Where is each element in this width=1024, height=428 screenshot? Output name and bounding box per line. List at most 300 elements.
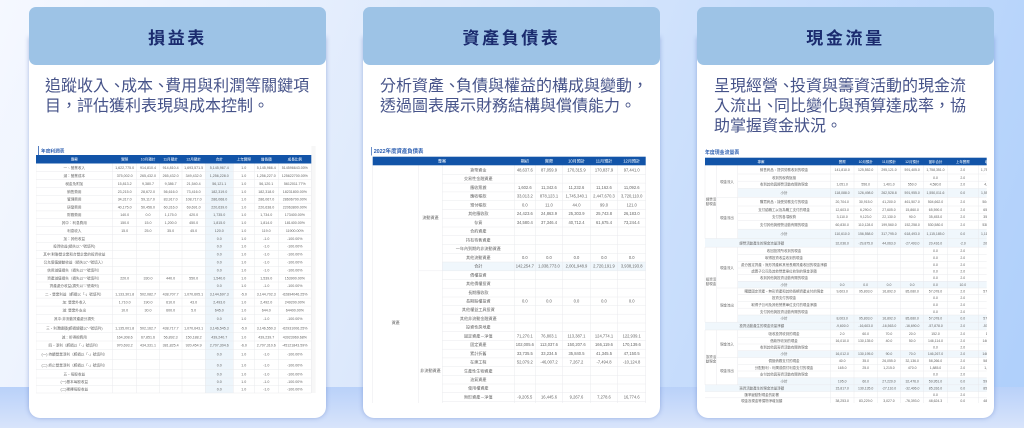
- table rows: current assets: 97,441.0: [624, 167, 640, 172]
- table rows: operating activities: 0.0: [960, 232, 965, 236]
- row group labels: 資產: [392, 319, 400, 325]
- table rows: current assets: 34,580.4: [517, 220, 533, 225]
- table rows: operating activities: 0.0: [960, 191, 965, 195]
- table rows: other gains and losses: 資產減值損失（損失以"-"號填列）: [47, 276, 101, 281]
- table rows: revenue and expenses: 60,316.0: [164, 205, 178, 209]
- table header row: 12月預計: [623, 157, 640, 163]
- table rows: investing activities: 0.0: [933, 296, 938, 300]
- table rows: other gains and losses: 1.0: [241, 284, 246, 288]
- table rows: investing activities: 2.0: [960, 263, 965, 267]
- table rows: current assets: 142,254.7: [516, 264, 535, 269]
- table rows: current assets: 24,863.9: [541, 211, 558, 216]
- table rows: profit and earnings per share: 3,144,697.3: [210, 292, 229, 296]
- table rows: revenue and expenses: 管理費用: [67, 197, 82, 202]
- table rows: revenue and expenses: 56,616.0: [164, 190, 178, 194]
- table rows: profit and earnings per share: -5.0: [241, 292, 247, 296]
- table rows: other gains and losses: 330.0: [144, 277, 152, 281]
- table rows: operating activities: 支付的各項稅費: [772, 214, 797, 219]
- table rows: other gains and losses: 1.0: [241, 237, 246, 241]
- table header row: 專案: [438, 157, 446, 163]
- table rows: operating activities: [739, 167, 999, 246]
- table rows: operating activities: 118,088.0: [835, 191, 850, 195]
- table rows: revenue and expenses: 140.0: [120, 213, 129, 217]
- table rows: operating activities: 銷售商品、提供勞務收到的現金: [760, 167, 809, 172]
- table: 2022 balance sheet: [371, 147, 646, 403]
- table rows: non-current assets: 0.0: [601, 298, 608, 303]
- table rows: investing activities: 投資支付的現金: [772, 295, 797, 300]
- table rows: financing activities: 1,885.0: [930, 366, 941, 370]
- table rows: investing activities: 收回投資所收到的現金: [767, 248, 802, 253]
- table rows: other gains and losses: -100.00%: [287, 253, 303, 257]
- table rows: profit and earnings per share: 190.0: [144, 301, 152, 305]
- table rows: non-current assets: 0.0: [546, 298, 553, 303]
- table rows: financing activities: 195.0: [838, 379, 847, 383]
- table rows: non-current assets: [460, 271, 642, 399]
- table rows: other gains and losses: -100.00%: [287, 237, 303, 241]
- table rows: operating activities: 1,550,011.6: [927, 191, 945, 195]
- table rows: investing activities: 0.0: [933, 276, 938, 280]
- table rows: financing activities: 0.0: [960, 379, 965, 383]
- table rows: current assets: 170,315.9: [567, 167, 586, 172]
- table rows: revenue and expenses: 21,540.4: [187, 182, 201, 186]
- table rows: revenue and expenses: 1,734.0: [260, 213, 272, 217]
- table header row: 上年實際: [956, 159, 970, 164]
- table rows: investing activities: 85,080.0: [906, 289, 919, 293]
- table rows: non-current assets: 170,139.6: [623, 342, 642, 347]
- table rows: operating activities: 支付其他與經營活動有關的現金: [760, 222, 809, 227]
- table rows: financing activities: 1,215.0: [883, 366, 895, 370]
- table rows: revenue and expenses: 稅金及附加: [65, 181, 84, 186]
- table rows: operating activities: 199,560.0: [881, 223, 897, 227]
- table rows: profit and earnings per share: 164,308.6: [117, 335, 133, 339]
- table rows: investing activities: -9,600.0: [836, 324, 849, 328]
- table rows: non-current assets: 0.0: [522, 298, 528, 303]
- table rows: investing activities: 85,680.0: [906, 316, 919, 320]
- table rows: financing activities: 26,055.0: [882, 359, 896, 363]
- table rows: profit and earnings per share: 減: 營業外支出: [63, 307, 86, 312]
- row group labels: [392, 214, 441, 373]
- table rows: investing activities: [739, 248, 997, 328]
- row group labels: 籌資活: [706, 354, 717, 359]
- table header row: 專案: [758, 159, 765, 164]
- table rows: financing activities: 152.0: [931, 332, 940, 336]
- table rows: revenue and expenses: 1.0: [241, 190, 246, 194]
- table rows: operating activities: -2.0: [960, 242, 966, 246]
- table rows: revenue and expenses: 56,120.1: [259, 182, 273, 186]
- table rows: profit and earnings per share: (二) 終止營業淨利（虧損以「-」號填列）: [41, 362, 107, 367]
- table rows: operating activities: 1,051.0: [836, 183, 848, 187]
- table rows: profit and earnings per share: 5.0: [191, 308, 196, 312]
- table rows: profit and earnings per share: -1.0: [263, 373, 269, 377]
- table rows: operating activities: 504,662.0: [928, 200, 943, 204]
- row group labels: 現金流出: [720, 302, 734, 307]
- table rows: current assets: 0.0: [601, 255, 608, 260]
- table rows: current assets: 878,123.1: [540, 194, 559, 199]
- table rows: revenue and expenses: 181400.00%: [285, 221, 306, 225]
- table rows: profit and earnings per share: 30.0: [144, 308, 152, 312]
- table rows: revenue and expenses: 23,215.0: [118, 190, 132, 194]
- table rows: other gains and losses: 加：其他收益: [64, 236, 85, 241]
- table rows: current assets: 其他流動資產: [466, 254, 491, 260]
- table rows: financing activities: 27,220.0: [882, 379, 896, 383]
- table rows: operating activities: 1,115,185.0: [927, 232, 945, 236]
- table rows: other gains and losses: 1,539.0: [260, 277, 272, 281]
- table rows: revenue and expenses: 減：營業成本: [64, 173, 85, 178]
- table header row: 增長額: [261, 157, 272, 162]
- table rows: profit and earnings per share: 2,493.0: [213, 301, 225, 305]
- table rows: revenue and expenses: 349,432.0: [186, 174, 202, 178]
- table rows: non-current assets: 無形資產－淨值: [464, 393, 493, 399]
- table rows: profit and earnings per share: 其中:非流動資產處分損失: [54, 316, 95, 321]
- table rows: current assets: 0.0: [546, 255, 553, 260]
- heading: income statement: [29, 7, 326, 65]
- table rows: operating activities: 556.0: [861, 183, 870, 187]
- description text: [714, 77, 966, 135]
- table rows: operating activities: 591,405.0: [905, 168, 920, 172]
- table rows: profit and earnings per share: 1,710.0: [119, 301, 131, 305]
- table rows: revenue and expenses: 286,068.0: [211, 198, 227, 202]
- table rows: profit and earnings per share: 3,144,702.3: [257, 292, 276, 296]
- table rows: current assets: 11,342.6: [541, 185, 558, 190]
- table rows: financing activities: 籌資活動產生的現金流量淨額: [739, 385, 785, 390]
- table rows: current assets: 48,637.6: [517, 167, 533, 172]
- table rows: profit and earnings per share: -5.0: [241, 327, 247, 331]
- table: annual income statement: [36, 146, 312, 394]
- table rows: profit and earnings per share: 438,707.7: [163, 292, 179, 296]
- row group labels: 現金流出: [720, 215, 734, 220]
- table header row: 11月預計: [596, 157, 612, 163]
- table rows: non-current assets: 35,840.5: [569, 351, 585, 356]
- table rows: operating activities: 156,558.0: [858, 232, 873, 236]
- table rows: other gains and losses: 0.0: [217, 269, 222, 273]
- table rows: revenue and expenses: 1,256,227.0: [257, 174, 276, 178]
- table rows: revenue and expenses: 1,735.0: [213, 213, 225, 217]
- heading: income statement: 損益表: [148, 29, 207, 48]
- table rows: profit and earnings per share: 600.0: [166, 308, 175, 312]
- row group labels: 動現金: [706, 201, 717, 206]
- table rows: financing activities: 0.0: [933, 372, 938, 376]
- table title: [38, 146, 65, 155]
- table rows: other gains and losses: 0.0: [217, 261, 222, 265]
- table rows: investing activities: 0.0: [933, 256, 938, 260]
- table header row: 實際: [121, 157, 129, 162]
- table rows: profit and earnings per share: 381,825.4: [163, 343, 179, 347]
- table rows: current assets: 40,712.4: [569, 220, 585, 225]
- table rows: profit and earnings per share: 502,082.7: [140, 292, 156, 296]
- table rows: current assets: 170,837.9: [595, 167, 614, 172]
- table rows: financing activities: 60.0: [862, 332, 869, 336]
- table rows: revenue and expenses: 914,810.4: [140, 166, 156, 170]
- table header row: [373, 157, 646, 165]
- table rows: financing activities: 48,624.3: [929, 399, 942, 403]
- table rows: other gains and losses: -100.00%: [287, 284, 303, 288]
- table rows: operating activities: 262,528.8: [881, 191, 897, 195]
- table rows: financing activities: [739, 331, 998, 403]
- table header row: 實際: [839, 159, 846, 164]
- table rows: revenue and expenses: 1.0: [241, 166, 246, 170]
- table rows: financing activities: 收到其他與籌資活動有關的現金: [760, 344, 809, 349]
- table header row: 專案: [71, 157, 78, 162]
- table rows: revenue and expenses: 15.0: [121, 229, 128, 233]
- table rows: financing activities: 分配股利、利潤或償付利息支付的現金: [755, 365, 814, 370]
- table rows: revenue and expenses: 120.0: [215, 229, 224, 233]
- table rows: non-current assets: 使用權資產: [468, 385, 489, 391]
- table rows: financing activities: 83,229.0: [859, 399, 872, 403]
- table rows: revenue and expenses: 34,317.0: [118, 198, 132, 202]
- table rows: investing activities: 8,003.0: [836, 316, 848, 320]
- table rows: revenue and expenses: 25.0: [144, 229, 152, 233]
- table rows: investing activities: 0.0: [863, 283, 868, 287]
- table rows: other gains and losses: 1.0: [241, 277, 246, 281]
- table rows: revenue and expenses: 22063800.00%: [283, 205, 308, 209]
- table rows: profit and earnings per share: 150,188.2: [186, 335, 202, 339]
- table rows: profit and earnings per share: 1.0: [241, 335, 246, 339]
- table rows: investing activities: 處分固定資產、無形資產和其他長期資產收回的現金淨額: [741, 262, 828, 267]
- table rows: financing activities: 2.0: [960, 393, 965, 397]
- table rows: profit and earnings per share: 0.0: [217, 388, 222, 392]
- table header row: 成長比例: [288, 157, 302, 162]
- table rows: investing activities: -57,878.0: [928, 324, 943, 328]
- table rows: profit and earnings per share: 56,892.3: [164, 335, 178, 339]
- row group labels: 現金流入: [720, 342, 734, 347]
- table rows: profit and earnings per share: 1.0: [241, 308, 246, 312]
- table rows: profit and earnings per share: 67,851.6: [141, 335, 155, 339]
- table rows: operating activities: 小計: [781, 190, 788, 195]
- row group labels: 動現金: [706, 281, 717, 286]
- table rows: current assets: 持有待售資產: [466, 236, 491, 242]
- table rows: operating activities: 2.0: [960, 208, 965, 212]
- table rows: other gains and losses: -100.00%: [287, 269, 303, 273]
- table rows: current assets: 61,675.4: [596, 220, 613, 225]
- table rows: financing activities: 60.0: [862, 379, 869, 383]
- table rows: non-current assets: 124,774.1: [595, 333, 614, 338]
- table rows: profit and earnings per share: 加: 營業外收入: [63, 300, 86, 305]
- table rows: profit and earnings per share: 二、營業利益（虧損以「-」號填列）: [45, 291, 104, 296]
- description text: 呈現經營、投資與籌資活動的現金流: [714, 78, 966, 95]
- table rows: operating activities: 125,552.0: [858, 168, 873, 172]
- table rows: non-current assets: 債權投資: [470, 271, 486, 277]
- table header row: 當年合計: [929, 159, 943, 164]
- table rows: revenue and expenses: 5612011.77%: [284, 182, 307, 186]
- table rows: investing activities: 2.0: [960, 276, 965, 280]
- table rows: revenue and expenses: 11900.00%: [286, 229, 305, 233]
- table rows: investing activities: 處置子公司及其他營業單位收到的現金淨額: [751, 268, 817, 273]
- table rows: non-current assets: 166,119.6: [595, 342, 614, 347]
- description text: 入流出、同比變化與預算達成率，協: [714, 98, 966, 115]
- table rows: investing activities: 0.0: [933, 269, 938, 273]
- table rows: financing activities: 16,010.0: [836, 339, 849, 343]
- table rows: investing activities: 小計: [781, 315, 788, 320]
- table rows: other gains and losses: 1.0: [241, 253, 246, 257]
- table rows: investing activities: 購建固定資產、無形資產和其他長期資產支付的現金: [744, 288, 824, 293]
- table header row: 10月預計: [141, 157, 156, 162]
- table rows: investing activities: 9,603.0: [836, 289, 848, 293]
- row group labels: 現金流入: [720, 179, 734, 184]
- table rows: revenue and expenses: 28606700.00%: [283, 198, 308, 202]
- table header row: 上年實際: [237, 157, 251, 162]
- table rows: other gains and losses: 0.0: [217, 253, 222, 257]
- table rows: revenue and expenses: 1,256,228.0: [210, 174, 229, 178]
- table header row: 合計: [216, 157, 223, 162]
- table rows: revenue and expenses: 9,386.7: [165, 182, 177, 186]
- table rows: operating activities: 2.0: [960, 183, 965, 187]
- table rows: revenue and expenses: 173400.00%: [285, 213, 306, 217]
- table rows: financing activities: 2.0: [960, 339, 965, 343]
- table rows: current assets: 預付帳款: [470, 201, 486, 207]
- table rows: financing activities: 小計: [781, 351, 788, 356]
- table rows: revenue and expenses: 108,717.0: [186, 198, 202, 202]
- table rows: investing activities: 0.0: [933, 283, 938, 287]
- table rows: investing activities: 0.0: [960, 316, 965, 320]
- table rows: financing activities: 146,267.0: [928, 352, 943, 356]
- table rows: non-current assets: 41,345.5: [596, 351, 613, 356]
- table rows: financing activities: 130,135.0: [858, 339, 873, 343]
- table header row: 12月預計: [905, 159, 920, 164]
- table rows: non-current assets: 長期股權投資: [466, 297, 491, 303]
- table rows: non-current assets: 固定資產－淨值: [464, 332, 493, 338]
- table rows: non-current assets: 113,387.1: [568, 333, 586, 338]
- table rows: non-current assets: 150,207.6: [567, 342, 586, 347]
- table rows: other gains and losses: -1.0: [263, 253, 269, 257]
- table header row: 10月預計: [859, 159, 873, 164]
- table rows: profit and earnings per share: 434,331.1: [140, 343, 156, 347]
- table rows: operating activities: 收到其他與經營活動有關的現金: [760, 182, 809, 187]
- table title: [371, 147, 424, 156]
- table rows: operating activities: -29,875.0: [858, 242, 873, 246]
- table rows: financing activities: -27,110.0: [882, 386, 896, 390]
- table rows: current assets: 11,232.6: [569, 185, 585, 190]
- table rows: profit and earnings per share: -100.00%: [287, 363, 303, 367]
- table rows: investing activities: 投資活動產生的現金流量淨額: [739, 323, 785, 328]
- table rows: operating activities: 1,401.0: [883, 183, 895, 187]
- table rows: financing activities: 130,195.0: [858, 352, 873, 356]
- table rows: profit and earnings per share: 0.0: [217, 380, 222, 384]
- table rows: current assets: 87,059.9: [541, 167, 558, 172]
- table rows: non-current assets: 累計折舊: [470, 350, 486, 356]
- table rows: non-current assets: -7,494.8: [596, 359, 612, 364]
- table rows: revenue and expenses: 其中：利息費用: [62, 220, 87, 225]
- table rows: revenue and expenses: 1,200.0: [165, 221, 177, 225]
- table rows: operating activities: 經營活動產生的現金流量淨額: [739, 241, 785, 246]
- table rows: revenue and expenses: 18231800.00%: [283, 190, 308, 194]
- table rows: profit and earnings per share: -100.00%: [287, 352, 303, 356]
- table rows: other gains and losses: 153900.00%: [285, 277, 306, 281]
- table rows: non-current assets: 長期應收款: [468, 289, 489, 295]
- table rows: other gains and losses: 220.0: [120, 277, 129, 281]
- table rows: operating activities: 2.0: [960, 168, 965, 172]
- table rows: operating activities: 6,290.0: [860, 208, 872, 212]
- table rows: operating activities: 317,795.0: [881, 232, 897, 236]
- description text: 助掌握資金狀況。: [714, 118, 842, 135]
- table rows: revenue and expenses: 1.0: [241, 174, 246, 178]
- table rows: investing activities: 57,078.0: [929, 316, 942, 320]
- table rows: operating activities: 550.0: [908, 183, 917, 187]
- table rows: revenue and expenses: 15,813.2: [118, 182, 132, 186]
- table header row: 10月預計: [568, 157, 585, 163]
- table rows: profit and earnings per share: (二)稀釋每股收益: [61, 387, 88, 392]
- table rows: investing activities: 57,078.0: [929, 289, 942, 293]
- table rows: other gains and losses: 公允價值變動收益（損失以"-"號填入）: [44, 260, 105, 265]
- table rows: other gains and losses: -100.00%: [287, 245, 303, 249]
- table rows: revenue and expenses: 125622700.00%: [282, 174, 309, 178]
- table rows: financing activities: 2.0: [960, 345, 965, 349]
- table rows: financing activities: 38,253.0: [836, 399, 849, 403]
- table rows: profit and earnings per share: 1,070,605.1: [184, 292, 203, 296]
- panel body: [697, 37, 994, 418]
- table rows: financing activities: 32,136.0: [906, 359, 919, 363]
- table rows: financing activities: 40.0: [886, 339, 892, 343]
- table rows: revenue and expenses: 265,432.0: [140, 174, 156, 178]
- table rows: profit and earnings per share: 249200.00%: [285, 301, 306, 305]
- table rows: current assets: 貨幣資金: [470, 166, 486, 172]
- table rows: financing activities: 15,817.0: [836, 386, 849, 390]
- table rows: financing activities: 70.0: [886, 332, 892, 336]
- table rows: revenue and expenses: 一、營業收入: [64, 165, 85, 170]
- table rows: operating activities: 295,121.0: [881, 168, 897, 172]
- table rows: profit and earnings per share: 1.0: [241, 380, 246, 384]
- table rows: operating activities: 591,955.0: [905, 191, 920, 195]
- table rows: other gains and losses: -1.0: [263, 261, 269, 265]
- table rows: non-current assets: 其他非流動金融資產: [460, 315, 497, 321]
- table rows: non-current assets: 7,278.6: [597, 394, 612, 399]
- table rows: current assets: 2,447,670.3: [593, 194, 616, 199]
- table rows: investing activities: 2.0: [960, 303, 965, 307]
- table rows: profit and earnings per share: 439,240.7: [211, 335, 227, 339]
- row group labels: [706, 179, 734, 373]
- table rows: revenue and expenses: 150.0: [120, 221, 129, 225]
- table rows: financing activities: 470.0: [908, 366, 917, 370]
- table rows: revenue and expenses: 1.0: [241, 198, 246, 202]
- table rows: financing activities: 2.0: [960, 352, 965, 356]
- table rows: operating activities: 110,128.0: [858, 223, 873, 227]
- table rows: investing activities: 2.0: [960, 289, 965, 293]
- table rows: revenue and expenses: 45.0: [190, 229, 197, 233]
- table rows: revenue and expenses: 73,416.0: [187, 190, 201, 194]
- table rows: financing activities: 130,135.0: [858, 386, 873, 390]
- table rows: non-current assets: 52,079.2: [517, 359, 533, 364]
- table rows: other gains and losses: 0.0: [217, 237, 222, 241]
- table rows: profit and earnings per share: 0.0: [217, 352, 222, 356]
- table rows: operating activities: 530,580.0: [928, 223, 943, 227]
- table rows: financing activities: 0.0: [960, 386, 965, 390]
- table rows: operating activities: 27,605.0: [882, 208, 896, 212]
- table rows: revenue and expenses: 9,380.7: [142, 182, 154, 186]
- table rows: profit and earnings per share: -1.0: [263, 352, 269, 356]
- table rows: operating activities: 2.0: [960, 176, 965, 180]
- table rows: non-current assets: 0.0: [574, 298, 580, 303]
- table rows: revenue and expenses: 研發費用: [67, 204, 82, 209]
- table: annual cash flow statement: [704, 149, 987, 403]
- table rows: profit and earnings per share: 439,239.7: [258, 335, 274, 339]
- table rows: current assets: 2,001,948.9: [566, 264, 588, 269]
- table rows: non-current assets: 投資性房地產: [466, 324, 491, 330]
- table rows: financing activities: 58,266.0: [929, 359, 942, 363]
- table rows: other gains and losses: 其中:對聯營企業和合營企業的投資收益: [43, 252, 106, 257]
- table rows: financing activities: 支付其他與籌資活動有關的現金: [760, 371, 809, 376]
- table rows: investing activities: 0.0: [933, 310, 938, 314]
- table rows: current assets: 44.0: [573, 202, 581, 207]
- table rows: profit and earnings per share: -100.00%: [287, 373, 303, 377]
- table rows: operating activities: 12,603.0: [836, 208, 849, 212]
- table rows: profit and earnings per share: 1.0: [241, 301, 246, 305]
- table rows: non-current assets: -9,205.5: [517, 394, 533, 399]
- table rows: profit and earnings per share: 1.0: [241, 373, 246, 377]
- table rows: profit and earnings per share: 1,070,643.1: [184, 327, 203, 331]
- table rows: financing activities: 2.0: [960, 332, 965, 336]
- table rows: current assets: 33,013.2: [517, 194, 533, 199]
- heading: cash flow: [697, 7, 994, 65]
- table title: 年度利潤表: [41, 147, 65, 154]
